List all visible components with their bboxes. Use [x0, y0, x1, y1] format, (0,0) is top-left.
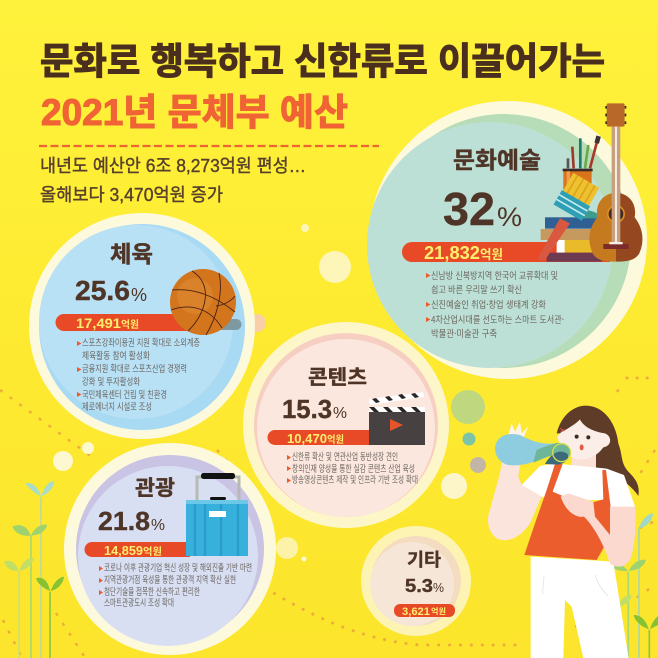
title: 문화로 행복하고 신한류로 이끌어가는	[40, 41, 605, 82]
amount bar: 17,491	[76, 315, 121, 331]
amount bar	[268, 430, 372, 446]
bullet list	[426, 268, 564, 340]
share: 32%: %	[497, 202, 522, 232]
amount bar: 억원	[143, 545, 162, 558]
heading: 콘텐츠: 콘텐츠	[308, 366, 367, 389]
sprouts: left	[4, 481, 64, 658]
panel: 체육	[29, 213, 255, 439]
heading: 문화예술: 문화예술	[453, 147, 541, 173]
bullet list: 지역관광거점 육성을 통한 관광객 지역 확산 실현	[104, 572, 236, 586]
share: 15.3%: 15.3	[282, 394, 332, 424]
bullet list: 신한류 확산 및 연관산업 동반성장 견인	[292, 449, 398, 463]
share: 32%	[443, 183, 522, 235]
icon: basketball	[170, 269, 236, 335]
panel: 문화예술	[367, 101, 647, 379]
bullet list: 박물관·미술관 구축	[431, 326, 497, 340]
panel: 콘텐츠	[243, 322, 449, 528]
heading: 관광: 관광	[135, 477, 175, 500]
amount bar	[85, 542, 190, 558]
bullet list: 창의인재 양성을 통한 실감 콘텐츠 산업 육성	[292, 461, 415, 475]
bullet list: 금융지원 확대로 스포츠산업 경쟁력	[82, 361, 187, 375]
heading: 체육: 체육	[110, 241, 153, 267]
sprouts: right	[611, 513, 658, 658]
bullet list: 스포츠강좌이용권 지원 확대로 소외계층	[82, 335, 200, 349]
share: 5.3%	[405, 576, 444, 596]
bullet list	[77, 335, 200, 413]
icon: clapperboard	[369, 392, 425, 445]
icon: suitcase	[186, 473, 248, 556]
bullet list: 코로나 이후 관광기업 혁신 성장 및 해외진출 기반 마련	[104, 560, 252, 574]
share: 25.6%: 25.6	[75, 275, 130, 306]
amount bar: 억원	[327, 433, 344, 446]
decorative bubbles	[53, 224, 486, 562]
share: 32%: 32	[443, 183, 495, 235]
summary text	[40, 156, 306, 205]
bullet list: 4차산업시대를 선도하는 스마트 도서관·	[431, 312, 564, 326]
summary text: 내년도 예산안 6조 8,273억원 편성…	[40, 156, 306, 176]
amount bar: 10,470	[287, 431, 327, 446]
amount bar: 3,621	[402, 606, 430, 618]
bullet list: 첨단기술을 접목한 신속하고 편리한	[104, 584, 200, 598]
share: 15.3%: %	[333, 405, 347, 422]
summary text: 올해보다 3,470억원 증가	[40, 185, 223, 205]
illustration: woman drinking from bottle	[488, 406, 639, 658]
share: 25.6%: %	[131, 285, 147, 305]
share: 5.3%: %	[433, 580, 444, 595]
bullet list: 국민체육센터 건립 및 친환경	[82, 387, 167, 401]
bullet list: 제로에너지 시설로 조성	[82, 399, 152, 413]
amount bar: 21,832	[424, 243, 480, 263]
subtitle: 2021 budget: 2021년 문체부 예산	[41, 92, 348, 133]
share: 5.3%: 5.3	[405, 576, 433, 596]
bullet list	[99, 560, 252, 609]
panel: 관광	[64, 443, 276, 655]
bullet list	[287, 449, 418, 486]
share: 21.8%: 21.8	[98, 506, 150, 536]
bullet list: 체육활동 참여 활성화	[82, 348, 150, 362]
amount bar: 14,859	[104, 543, 143, 558]
bullet list: 방송영상콘텐츠 제작 및 인프라 기반 조성 확대	[292, 472, 418, 486]
panel: 기타	[361, 526, 471, 636]
bullet list: 신남방 신북방지역 한국어 교류확대 및	[431, 268, 558, 282]
heading: 기타: 기타	[407, 550, 441, 570]
bullet list: 강화 및 투자활성화	[82, 374, 140, 388]
share: 21.8%: %	[151, 517, 165, 534]
amount bar: 억원	[480, 247, 503, 262]
amount bar	[402, 242, 610, 263]
amount bar: 억원	[121, 318, 139, 331]
bullet list: 쉽고 바른 우리말 쓰기 확산	[431, 282, 522, 296]
amount bar: 억원	[431, 606, 446, 616]
illustration: guitar, books, brushes	[537, 103, 642, 262]
amount bar	[394, 604, 455, 618]
amount bar	[56, 314, 242, 331]
bullet list: 신진예술인 취업·창업 생태계 강화	[431, 297, 546, 311]
bullet list: 스마트관광도시 조성 확대	[104, 595, 174, 609]
